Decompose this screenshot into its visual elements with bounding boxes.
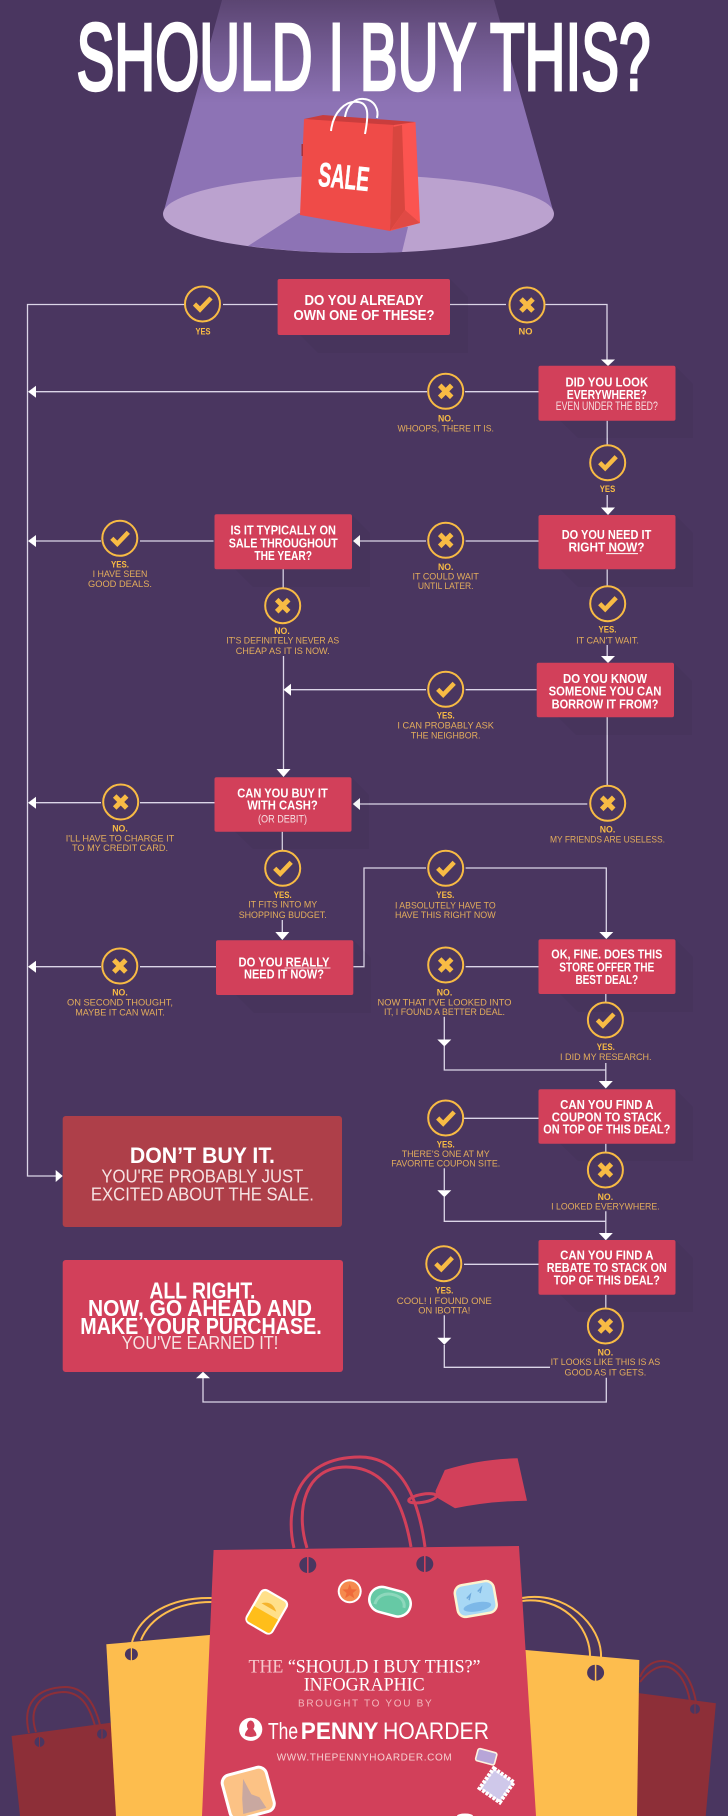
answer: yes research: I DID MY RESEARCH. [560, 1052, 652, 1062]
answer: yes good deals: I HAVE SEEN [93, 569, 147, 579]
question: cash: CAN YOU BUY IT [237, 785, 328, 800]
question: typically on sale: THE YEAR? [254, 548, 312, 563]
outcome panel: all right: YOU'VE EARNED IT! [122, 1333, 278, 1353]
logo: the penny hoarder: The [268, 1718, 298, 1744]
question: cash: (OR DEBIT) [258, 813, 307, 825]
answer: yes neighbor: YES. [437, 710, 455, 721]
answer: no whoops [397, 374, 494, 433]
spotlight illustration [163, 0, 554, 253]
answer: yes research [560, 1002, 652, 1062]
sticker: stamp [480, 1768, 514, 1802]
flow connector: no to did you look [450, 304, 615, 366]
answer: yes absolutely: YES. [436, 890, 454, 901]
question: already own: DO YOU ALREADY [304, 292, 424, 309]
icon: no cross: NO [518, 326, 532, 338]
flow connector: really need no [28, 961, 216, 973]
answer: no better deal: NO. [437, 988, 452, 999]
credit heading: INFOGRAPHIC [304, 1674, 425, 1696]
question: did you look [538, 366, 693, 438]
question: already own: OWN ONE OF THESE? [294, 307, 434, 324]
flow connector: did you look yes [601, 421, 615, 515]
answer: yes ibotta: COOL! I FOUND ONE [397, 1296, 492, 1306]
answer: no credit card [66, 784, 175, 853]
outcome panel: don't buy it: EXCITED ABOUT THE SALE. [91, 1184, 314, 1205]
answer: no looked everywhere [551, 1152, 660, 1211]
answer: no second thought: NO. [112, 988, 128, 999]
flow connector: cash no [28, 797, 214, 809]
question: best deal: BEST DEAL? [575, 972, 638, 987]
answer: yes neighbor: THE NEIGHBOR. [411, 730, 481, 740]
flow connector: typically on sale no [276, 569, 290, 777]
question: best deal: OK, FINE. DOES THIS [551, 947, 663, 962]
answer: no could wait: IT COULD WAIT [412, 571, 479, 581]
question: typically on sale: IS IT TYPICALLY ON [230, 523, 336, 538]
answer: no friends useless: NO. [600, 825, 615, 836]
outcome panel: don't buy it [63, 1116, 342, 1227]
answer: no second thought: ON SECOND THOUGHT, [67, 997, 173, 1007]
question: rebate: TOP OF THIS DEAL? [554, 1273, 660, 1288]
answer: yes: YES [600, 484, 615, 495]
answer: yes neighbor [397, 672, 495, 740]
answer: no credit card: NO. [112, 824, 128, 835]
question: coupon [538, 1089, 693, 1161]
answer: no credit card: TO MY CREDIT CARD. [72, 843, 168, 853]
question: need it now: DO YOU NEED IT [562, 527, 651, 542]
brought to you by: BROUGHT TO YOU BY [298, 1698, 432, 1710]
logo: the penny hoarder: PENNY [301, 1718, 378, 1745]
answer: no better deal: IT, I FOUND A BETTER DEAL. [384, 1007, 505, 1017]
question: typically on sale: SALE THROUGHOUT [229, 535, 338, 550]
outcome panel: don't buy it: DON’T BUY IT. [130, 1143, 275, 1168]
outcome panel: all right: NOW, GO AHEAD AND [88, 1295, 312, 1321]
sticker: green leaves [366, 1584, 414, 1619]
sticker: castle [220, 1765, 276, 1816]
question: really need [216, 940, 371, 1013]
answer: yes coupon site [391, 1100, 500, 1168]
answer: no never as cheap [226, 588, 339, 656]
question: did you look: DID YOU LOOK [566, 374, 649, 390]
answer: no looked everywhere: I LOOKED EVERYWHERE. [551, 1201, 660, 1211]
question: cash [214, 777, 369, 849]
answer: yes coupon site: THERE'S ONE AT MY [402, 1149, 490, 1159]
question: typically on sale [214, 514, 370, 587]
answer: yes coupon site: FAVORITE COUPON SITE. [391, 1158, 500, 1168]
flow connector: best deal no [437, 967, 606, 1070]
icon: yes check [185, 286, 220, 338]
question: need it now: RIGHT NOW? [568, 540, 645, 555]
logo: the penny hoarder [239, 1718, 489, 1745]
answer: no second thought: MAYBE IT CAN WAIT. [75, 1008, 165, 1018]
flow connector: yes to don't buy [28, 304, 278, 1182]
answer: yes neighbor: I CAN PROBABLY ASK [397, 721, 495, 731]
question: did you look: EVEN UNDER THE BED? [556, 401, 658, 413]
answer: no could wait: NO. [438, 562, 453, 573]
sticker: sky [454, 1580, 498, 1618]
flow connector: borrow yes [284, 684, 537, 696]
yellow bag right [520, 1597, 639, 1816]
answer: yes can't wait: YES. [598, 625, 616, 636]
question: best deal [538, 939, 693, 1012]
flow connector: rebate yes [437, 1264, 550, 1367]
answer: no friends useless [550, 786, 665, 844]
question: did you look: EVERYWHERE? [567, 387, 647, 402]
sticker: lavender ticket [475, 1748, 497, 1765]
answer: yes good deals: GOOD DEALS. [88, 579, 152, 589]
icon: red sale bag [300, 99, 420, 231]
question: coupon: COUPON TO STACK [552, 1110, 662, 1125]
question: rebate [538, 1240, 693, 1312]
answer: no better deal: NOW THAT I'VE LOOKED INTO [378, 997, 512, 1007]
answer: no whoops: WHOOPS, THERE IT IS. [397, 423, 494, 433]
question: rebate: CAN YOU FIND A [560, 1247, 654, 1262]
answer: no never as cheap: NO. [274, 626, 290, 637]
question: borrow: BORROW IT FROM? [552, 697, 658, 712]
maroon bag left [12, 1687, 125, 1816]
answer: yes research: YES. [597, 1042, 615, 1053]
answer: no friends useless: MY FRIENDS ARE USELESS. [550, 834, 665, 844]
answer: yes good deals: YES. [111, 560, 129, 571]
icon: no cross [510, 288, 544, 338]
answer: yes absolutely: I ABSOLUTELY HAVE TO [395, 900, 496, 910]
question: cash: WITH CASH? [247, 797, 318, 812]
answer: yes ibotta [397, 1246, 492, 1316]
flow connector: cash yes [275, 832, 289, 940]
outcome panel: all right: MAKE YOUR PURCHASE. [80, 1313, 322, 1339]
answer: no as good as it gets: IT LOOKS LIKE THIS IS AS [551, 1357, 660, 1367]
icon: yes check: YES [196, 326, 210, 338]
flow connector: really need yes [353, 868, 613, 967]
question: already own [278, 279, 468, 353]
answer: no never as cheap: CHEAP AS IT IS NOW. [236, 646, 330, 656]
answer: no never as cheap: IT'S DEFINITELY NEVER AS [226, 636, 339, 646]
question: coupon: ON TOP OF THIS DEAL? [543, 1121, 670, 1136]
answer: no as good as it gets: NO. [598, 1348, 613, 1359]
question: rebate: REBATE TO STACK ON [547, 1260, 667, 1275]
question: really need: NEED IT NOW? [244, 967, 324, 982]
sticker: starfish [338, 1579, 362, 1603]
credit heading [248, 1656, 480, 1696]
credit heading: THE “SHOULD I BUY THIS?” [248, 1656, 480, 1678]
question: best deal: STORE OFFER THE [559, 959, 655, 974]
question: need it now [538, 515, 693, 587]
flow connector: rebate no to purchase [196, 1295, 606, 1402]
flow connector: borrow no [353, 717, 607, 810]
answer: yes [590, 445, 625, 495]
answer: no could wait [412, 523, 479, 591]
icon: red sale bag: SALE [316, 156, 371, 199]
answer: no could wait: UNTIL LATER. [418, 581, 474, 591]
flow connector: need it now yes [601, 569, 615, 663]
website: WWW.THEPENNYHOARDER.COM [277, 1752, 452, 1764]
flow connector: coupon no [599, 1144, 613, 1240]
flow connector: did you look no [28, 386, 538, 398]
flow connector: need it now no [353, 535, 538, 547]
outcome panel: don't buy it: YOU'RE PROBABLY JUST [101, 1166, 303, 1187]
question: borrow [537, 663, 692, 735]
answer: yes coupon site: YES. [437, 1139, 455, 1150]
flow connector: typically on sale yes [28, 535, 214, 547]
maroon bag right [630, 1661, 716, 1816]
sticker: beach [245, 1588, 289, 1635]
question: borrow: DO YOU KNOW [563, 671, 648, 686]
question: borrow: SOMEONE YOU CAN [549, 683, 661, 698]
answer: no as good as it gets: GOOD AS IT GETS. [565, 1367, 646, 1377]
logo: the penny hoarder: HOARDER [383, 1718, 489, 1745]
answer: yes fits budget: YES. [274, 890, 292, 901]
question: really need: DO YOU REALLY [238, 955, 330, 970]
answer: no better deal [378, 948, 512, 1017]
flow connector: best deal yes [599, 994, 613, 1088]
answer: yes good deals [88, 521, 152, 589]
answer: no whoops: NO. [438, 414, 453, 425]
outcome panel: all right [63, 1260, 343, 1372]
answer: yes absolutely [395, 851, 496, 920]
answer: no credit card: I'LL HAVE TO CHARGE IT [66, 833, 175, 843]
flow connector: coupon yes [437, 1118, 606, 1221]
answer: yes absolutely: HAVE THIS RIGHT NOW [395, 910, 496, 920]
answer: yes can't wait: IT CAN'T WAIT. [576, 635, 639, 645]
answer: yes fits budget: IT FITS INTO MY [248, 899, 317, 909]
answer: yes ibotta: ON IBOTTA! [418, 1306, 470, 1316]
red bag centre with handles and tag [202, 1457, 536, 1816]
question: coupon: CAN YOU FIND A [560, 1097, 654, 1112]
answer: no second thought [67, 948, 173, 1018]
answer: yes can't wait [576, 586, 639, 645]
sticker: bottom edge [457, 1814, 473, 1816]
answer: no as good as it gets [551, 1308, 660, 1377]
answer: yes fits budget: SHOPPING BUDGET. [239, 910, 327, 920]
answer: no looked everywhere: NO. [598, 1192, 613, 1203]
answer: yes fits budget [239, 851, 327, 920]
yellow bag left [106, 1598, 215, 1816]
outcome panel: all right: ALL RIGHT. [149, 1278, 255, 1304]
answer: yes ibotta: YES. [435, 1285, 453, 1296]
